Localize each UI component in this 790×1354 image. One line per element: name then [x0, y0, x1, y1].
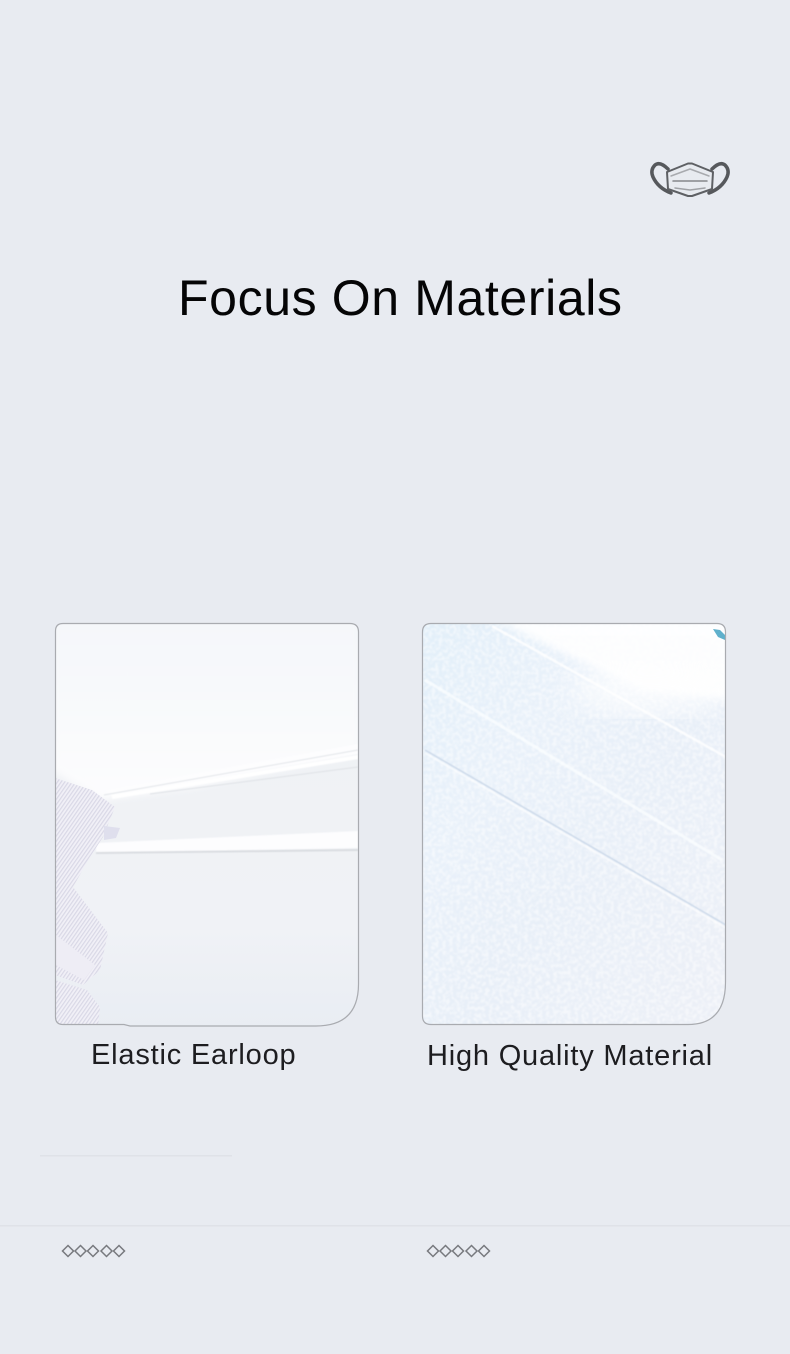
- bright area above strings: [56, 656, 358, 798]
- caption: high quality material: High Quality Material: [427, 1040, 713, 1072]
- panel: high quality material photo: [422, 620, 730, 1026]
- title: Focus On Materials: [178, 270, 623, 326]
- bright upper fold: [506, 624, 725, 698]
- bottom divider: [0, 1225, 790, 1226]
- icon: diamond row left: [62, 1246, 124, 1256]
- icon: diamond row right: [428, 1246, 490, 1256]
- panel: elastic earloop photo: [50, 620, 362, 1027]
- elastic string lower: [96, 831, 358, 853]
- blue edge mark: [713, 629, 726, 640]
- elastic strings upper: [104, 744, 358, 797]
- pleat lines: [425, 626, 726, 928]
- icon: face mask: [652, 164, 728, 196]
- caption: elastic earloop: Elastic Earloop: [91, 1039, 296, 1071]
- gloved fingers: [55, 778, 120, 1026]
- faint rule lower left: [40, 1155, 232, 1156]
